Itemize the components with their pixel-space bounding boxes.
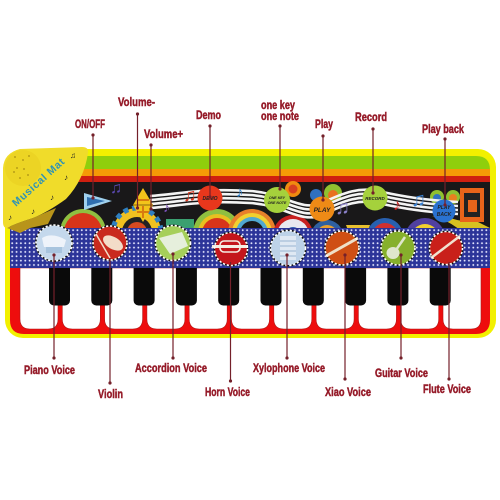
play back button	[432, 200, 456, 222]
accordion voice button	[154, 224, 192, 262]
callout: Accordion Voice: Accordion Voice	[135, 363, 207, 375]
play button	[310, 196, 334, 222]
one key one note button: ONE NOTE	[268, 201, 287, 205]
callout: Volume-: Volume-	[118, 97, 155, 109]
white piano keys	[20, 268, 481, 329]
black scene panel	[10, 182, 490, 230]
upper circles	[285, 181, 460, 204]
speaker grille	[5, 150, 41, 186]
music notes: ♫	[335, 197, 350, 219]
callout: Piano Voice: Piano Voice	[24, 365, 75, 377]
small notes: ♪	[50, 193, 54, 202]
small notes: ♪	[64, 173, 68, 182]
xiao voice button	[324, 230, 360, 266]
music notes: ♪	[163, 199, 170, 215]
one key one note button	[264, 187, 290, 213]
callout: ON/OFF	[75, 119, 105, 200]
flute voice button	[428, 230, 464, 266]
callout: Volume+	[144, 129, 183, 211]
callout: Xylophone Voice	[253, 253, 325, 375]
play back button: BACK	[437, 212, 452, 218]
callout: Accordion Voice	[135, 252, 207, 375]
piano voice button	[35, 224, 73, 262]
record button	[362, 186, 388, 210]
speaker unit	[3, 147, 88, 233]
callout: Piano Voice	[24, 253, 75, 377]
red stripe	[10, 176, 490, 183]
callout: Guitar Voice	[375, 253, 428, 380]
callout: Violin	[98, 258, 123, 401]
callout: Guitar Voice: Guitar Voice	[375, 368, 428, 380]
callout: Horn Voice	[205, 262, 250, 399]
xylophone voice button	[270, 230, 306, 266]
demo button	[198, 186, 222, 210]
callout: Xiao Voice	[325, 253, 371, 399]
record button: RECORD	[365, 196, 385, 201]
callout: Volume+: Volume+	[144, 129, 183, 141]
callout: Xylophone Voice: Xylophone Voice	[253, 363, 325, 375]
black piano keys	[49, 262, 451, 306]
callout: Flute Voice: Flute Voice	[423, 384, 471, 396]
small notes: ♪	[8, 213, 12, 222]
callout: Play back: Play back	[422, 124, 464, 136]
red key base	[10, 268, 490, 334]
play back button: PLAY	[438, 205, 451, 211]
callout: one key one note	[261, 100, 299, 191]
orange stripe	[10, 169, 490, 176]
orange square spiral	[460, 188, 484, 222]
callout: Flute Voice	[423, 262, 471, 396]
green stripe	[10, 156, 490, 176]
callout: ON/OFF: ON/OFF	[75, 119, 105, 131]
small notes: ♪	[31, 207, 35, 216]
callout: Xiao Voice: Xiao Voice	[325, 387, 371, 399]
brand label: Musical Mat	[10, 156, 67, 209]
music notes: ♫	[411, 189, 426, 211]
callout: Record	[355, 112, 387, 195]
one key one note button: ONE KEY	[269, 196, 286, 200]
small notes: ♫	[70, 151, 76, 160]
music notes: ♫	[110, 180, 122, 197]
small notes	[8, 151, 76, 222]
music notes: ♪	[236, 184, 244, 201]
callout: Horn Voice: Horn Voice	[205, 387, 250, 399]
callout: one key one note: one key	[261, 100, 295, 112]
mat yellow border	[5, 149, 496, 338]
callout: Violin: Violin	[98, 389, 123, 401]
guitar voice button	[380, 230, 416, 266]
callout: Demo: Demo	[196, 110, 221, 122]
horn voice button	[212, 232, 248, 266]
play button: PLAY	[314, 207, 331, 214]
volume buttons	[133, 188, 153, 222]
callout: Record: Record	[355, 112, 387, 124]
decorative arches	[61, 206, 490, 228]
callout: Volume-	[118, 97, 155, 210]
violin voice button	[92, 225, 128, 261]
callout: Demo	[196, 110, 221, 199]
musical play mat	[3, 147, 496, 338]
music notes: ♪	[393, 197, 401, 214]
ON/OFF triangle button	[84, 193, 112, 210]
music staff	[150, 190, 458, 217]
callout: one key one note: one note	[261, 111, 299, 123]
callout: Play	[315, 119, 333, 202]
music notes: ♫	[183, 185, 196, 205]
blue dotted band	[10, 228, 490, 268]
demo button: DEMO	[202, 196, 218, 202]
callout: Play back	[422, 124, 464, 207]
music notes	[110, 180, 426, 219]
callout: Play: Play	[315, 119, 333, 131]
